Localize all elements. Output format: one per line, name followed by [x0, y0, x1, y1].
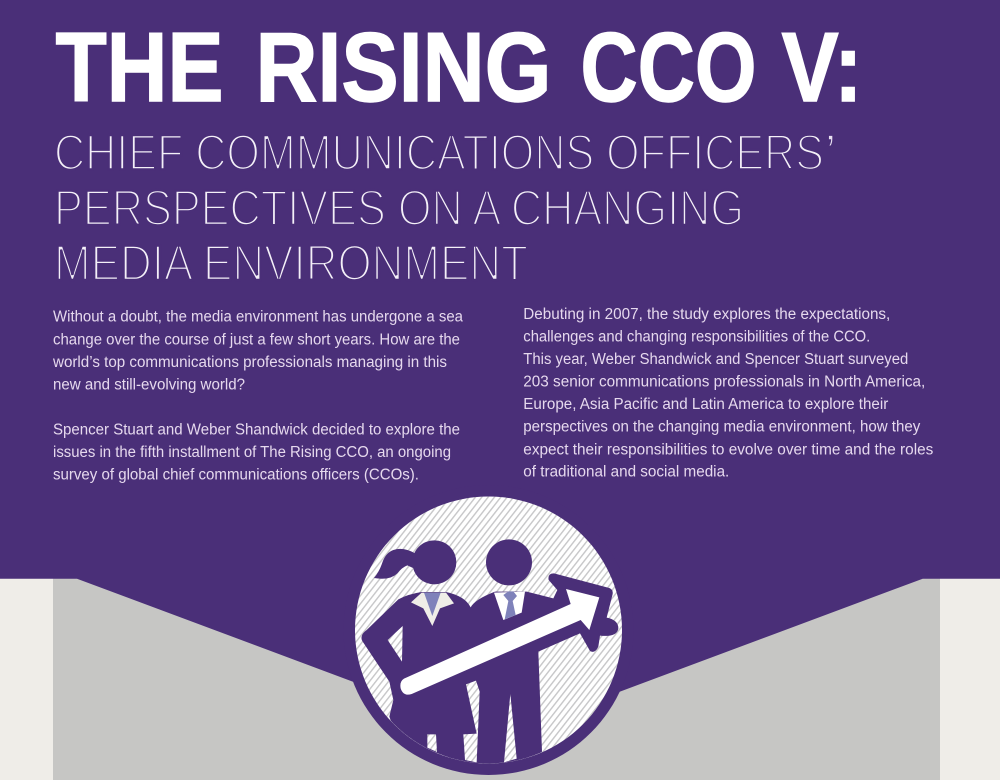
- subtitle: MEDIA ENVIRONMENT: [54, 234, 528, 291]
- man's tie: [503, 591, 517, 619]
- intro text: right column: [523, 306, 934, 481]
- body silhouettes: [361, 573, 618, 767]
- subtitle: CHIEF COMMUNICATIONS OFFICERS: [54, 124, 824, 180]
- purple emblem ring: [344, 485, 634, 775]
- intro text: left column: Spencer Stuart and Weber Shandwick decided to explore the: [53, 421, 460, 438]
- intro text: left column: change over the course of just a few short years. How are the: [53, 331, 460, 348]
- woman's collar: [411, 593, 454, 626]
- intro text: left column: issues in the fifth installment of The Rising CCO, an ongoing: [53, 444, 451, 461]
- gap between man's legs: [504, 694, 517, 762]
- gap under woman's arm: [388, 626, 403, 662]
- grey content panel: [53, 578, 940, 780]
- intro text: right column: Debuting in 2007, the study explores the expectations,: [523, 306, 890, 323]
- intro text: right column: challenges and changing responsibilities of the CCO.: [523, 328, 870, 346]
- hatched circle background: [355, 496, 622, 764]
- man's head: [486, 539, 532, 585]
- title: THE: [56, 12, 224, 122]
- intro text: left column: [52, 309, 463, 484]
- title: [56, 12, 862, 122]
- intro text: left column: new and still-evolving world?: [53, 376, 245, 393]
- subtitle: PERSPECTIVES ON A CHANGING: [54, 179, 744, 236]
- intro text: left column: world’s top communications professionals managing in this: [52, 354, 447, 371]
- intro text: right column: of traditional and social media.: [523, 464, 729, 481]
- subtitle: [54, 124, 836, 291]
- gap between woman's legs: [427, 734, 437, 752]
- intro text: left column: survey of global chief communications officers (CCOs).: [53, 466, 419, 484]
- man's shirt: [494, 592, 525, 620]
- intro text: right column: This year, Weber Shandwick and Spencer Stuart surveyed: [523, 351, 908, 368]
- subtitle: ’: [825, 124, 836, 180]
- intro text: left column: Without a doubt, the media environment has undergone a sea: [53, 309, 463, 326]
- intro text: right column: 203 senior communications professionals in North America,: [523, 374, 925, 391]
- rising white arrow: [400, 589, 599, 695]
- woman's scarf: [424, 593, 441, 616]
- intro text: right column: perspectives on the changing media environment, how they: [523, 419, 921, 436]
- title: CCO: [580, 12, 756, 122]
- figures: [361, 539, 618, 767]
- title: RISING: [256, 12, 552, 122]
- intro text: right column: Europe, Asia Pacific and Latin America to explore their: [523, 396, 888, 413]
- intro text: right column: expect their responsibilities to evolve over time and the roles: [523, 441, 934, 458]
- title: V:: [782, 12, 862, 122]
- gap between figures: [463, 681, 480, 762]
- woman's head and ponytail: [374, 540, 456, 584]
- emblem: two executives holding a rising arrow: [353, 496, 622, 775]
